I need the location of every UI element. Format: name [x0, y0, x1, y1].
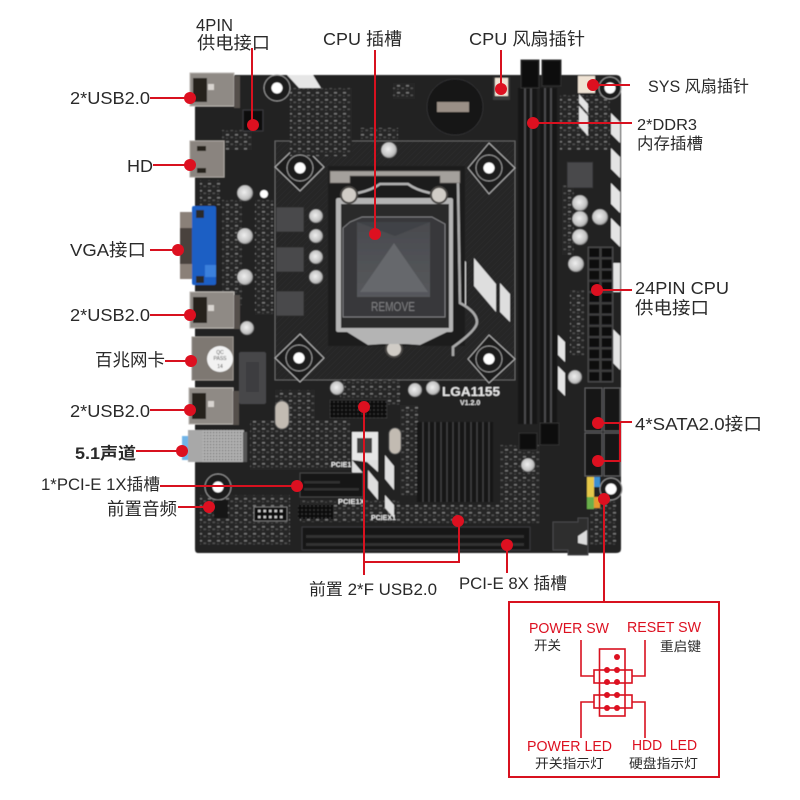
DIMM slot 1 [518, 88, 537, 424]
retention lever [453, 183, 477, 356]
POWER LED: POWER LED [527, 738, 612, 755]
4-pin power connector [243, 110, 263, 131]
mounting holes [205, 75, 622, 500]
LAN port: PASS [214, 356, 227, 362]
edge white stripes [558, 94, 620, 396]
label: front USB: 前置 2*F USB2.0 [309, 580, 437, 599]
board substrate [195, 75, 621, 553]
right labels [635, 77, 762, 434]
white corner stripe [287, 75, 321, 88]
PCIEX1: PCIEX1 [371, 515, 396, 522]
PCI-E x1 slot [300, 473, 363, 497]
label: 4PIN power: 4PIN [196, 15, 233, 35]
PCI-E x8 slot [302, 527, 530, 550]
开关指示灯: 开关指示灯 [535, 756, 604, 771]
重启键: 重启键 [660, 639, 701, 654]
label: USB top: 2*USB2.0 [70, 88, 150, 108]
label: HD: HD [127, 156, 153, 176]
top labels [196, 15, 585, 53]
socket base [328, 166, 465, 346]
ATX 24-pin connector [588, 247, 613, 382]
socket shell [343, 217, 445, 317]
USB header [330, 400, 387, 418]
top-left USB port [190, 73, 240, 108]
label: audio: 5.1声道 [75, 443, 137, 463]
CPU socket [328, 166, 477, 357]
label: memory slot: 内存插槽 [637, 135, 703, 153]
REMOVE label: REMOVE [371, 300, 415, 314]
top bracket [330, 171, 460, 183]
SYS fan header [578, 76, 595, 93]
label: VGA: VGA接口 [70, 240, 146, 260]
bottom tongue [347, 332, 447, 345]
LGA1155: LGA1155 [442, 384, 500, 399]
front panel header [587, 477, 600, 509]
开关: 开关 [534, 638, 561, 653]
front audio header [214, 500, 228, 518]
centre diagonal white stripes [352, 237, 510, 518]
PCI-E latch [553, 518, 588, 555]
DIMM slot 2 [540, 88, 557, 424]
CMOS battery holder [427, 79, 483, 135]
LAN port: 14 [217, 364, 223, 370]
HDMI port [190, 141, 224, 177]
cover plate [357, 222, 430, 297]
capacitors [237, 142, 608, 472]
label: DDR3: 2*DDR3 [637, 117, 697, 134]
header pins [604, 654, 620, 711]
small component clusters [200, 83, 616, 545]
PCIE1: PCIE1 [331, 462, 351, 469]
pinout diagram [581, 640, 645, 738]
callout lines and dots [136, 48, 632, 601]
motherboard [180, 60, 622, 555]
DDR3 slots [518, 60, 561, 450]
HDD LED: HDD LED [632, 737, 697, 754]
label: LAN: 百兆网卡 [95, 350, 165, 370]
lower USB port [189, 388, 239, 425]
label: 4PIN power sub: 供电接口 [197, 33, 270, 53]
debug headers [254, 505, 333, 521]
label: USB middle: 2*USB2.0 [70, 305, 150, 325]
LAN port: QC [216, 350, 224, 356]
CPU fan header [493, 77, 510, 100]
front panel pinout panel [509, 602, 719, 777]
SATA connectors [585, 388, 620, 476]
middle USB port [190, 292, 240, 329]
panel border [509, 602, 719, 777]
label: 24PIN: 24PIN CPU [635, 278, 729, 298]
DIMM latches [519, 60, 561, 450]
PCIE1X: PCIE1X [338, 497, 365, 506]
crystal oscillators [275, 401, 401, 454]
label: SATA: 4*SATA2.0接口 [635, 414, 762, 434]
version: V1.2.0 [460, 400, 480, 407]
label: USB lower: 2*USB2.0 [70, 401, 150, 421]
POWER SW: POWER SW [529, 620, 610, 637]
retention frame [336, 198, 453, 332]
board silkscreen text [331, 384, 500, 522]
chipset heatsink [417, 422, 493, 502]
VGA port [180, 206, 216, 285]
label: PCI-E 1X: 1*PCI-E 1X插槽 [41, 475, 160, 494]
audio jack block [182, 430, 247, 462]
label: CPU fan: CPU 风扇插针 [469, 29, 585, 49]
callout dots [172, 79, 610, 551]
bottom labels [309, 574, 567, 599]
label: 24PIN sub: 供电接口 [635, 298, 709, 318]
label: front audio: 前置音频 [107, 499, 177, 519]
label: PCI-E 8X: PCI-E 8X 插槽 [459, 574, 567, 593]
硬盘指示灯: 硬盘指示灯 [629, 756, 698, 771]
LAN port [192, 337, 266, 404]
traces outline around CPU area [275, 141, 515, 383]
label: SYS fan: SYS 风扇插针 [648, 77, 749, 96]
label: CPU socket: CPU 插槽 [323, 29, 402, 49]
RESET SW: RESET SW [627, 619, 702, 636]
left labels [41, 88, 177, 519]
socket screws [341, 187, 447, 357]
QR sticker [352, 432, 378, 460]
VRM chokes [276, 162, 593, 316]
